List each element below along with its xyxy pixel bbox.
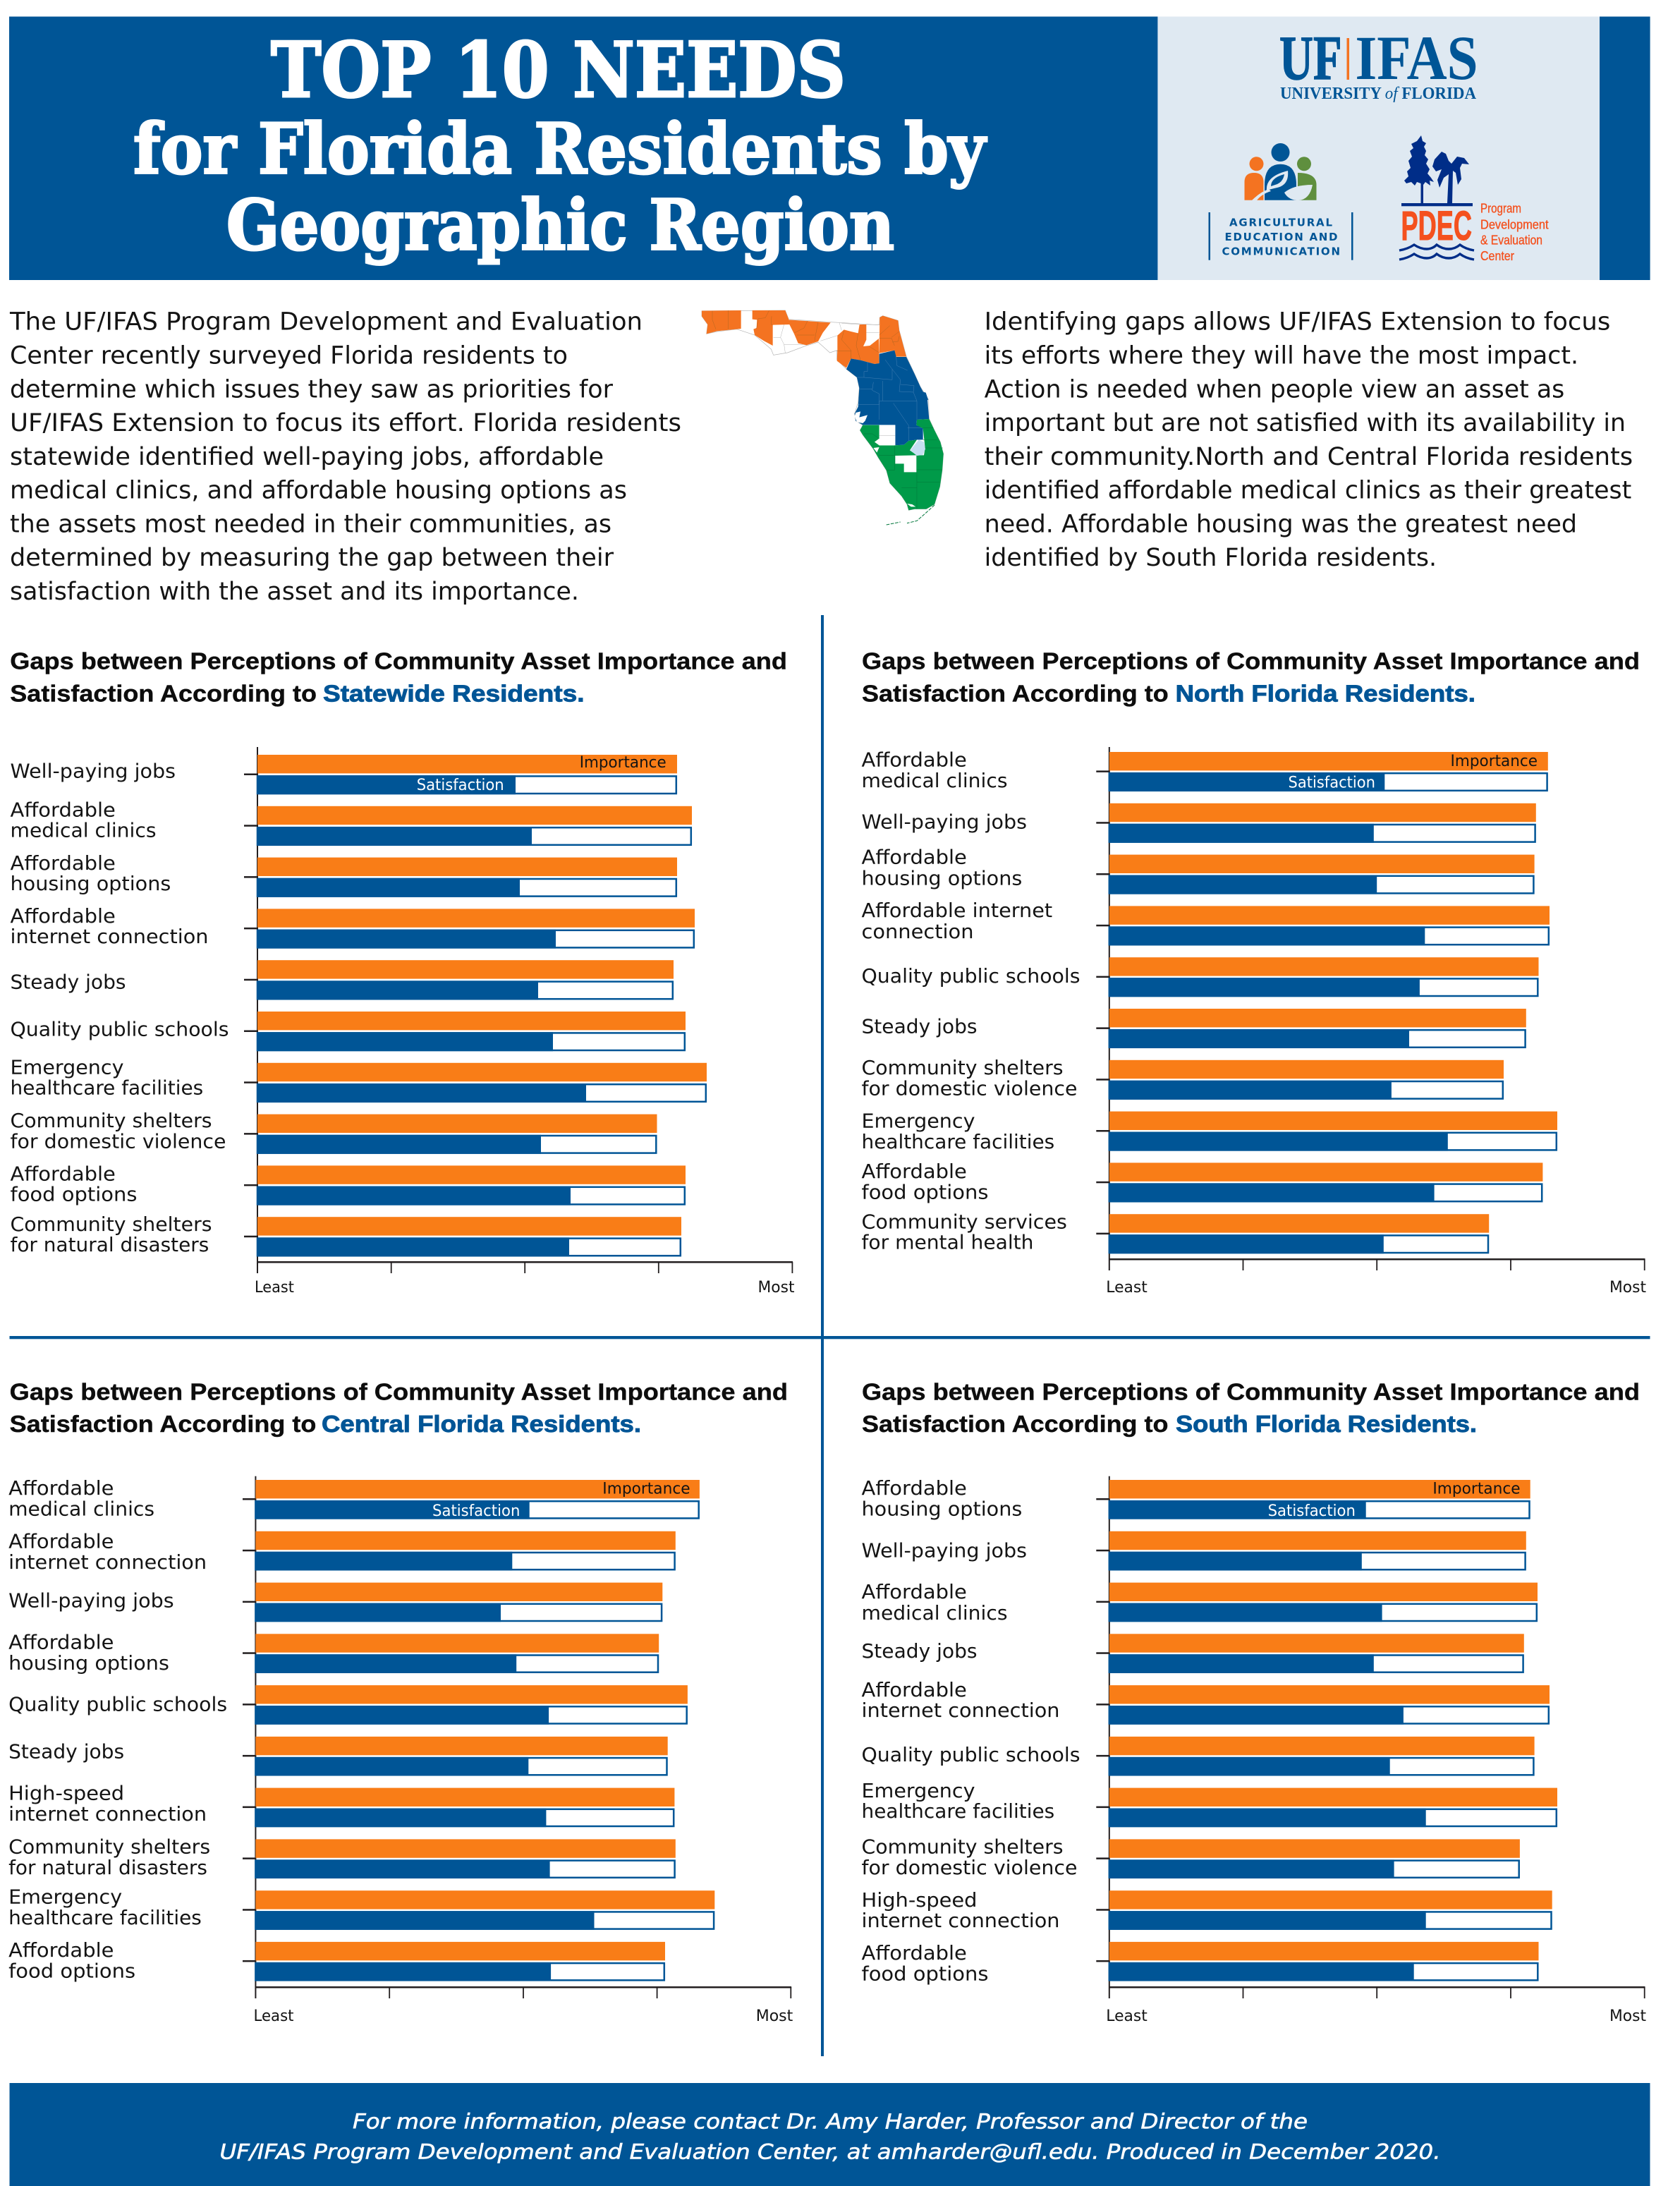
row: quality public schools: Quality public schools [862,1743,1081,1766]
chart axis: north florida: Least [1106,1279,1148,1297]
row: affordable medical clinics: medical clinics [862,769,1007,792]
row: community shelters for domestic violence [862,1835,1520,1879]
row: affordable medical clinics: medical clinics [10,818,157,842]
row: affordable food options: food options [862,1962,989,1986]
heading: south florida: South Florida Residents. [1176,1411,1477,1437]
row: affordable medical clinics: Affordable [8,1476,114,1500]
intro text left: the assets most needed in their communities, as [10,510,611,538]
row: affordable internet connection: Affordable [862,1678,967,1701]
intro text right: Identifying gaps allows UF/IFAS Extension to focus [985,308,1610,336]
intro text left: determine which issues they saw as priorities for [10,375,614,403]
heading: north florida: Gaps between Perceptions of Community Asset Importance and [862,648,1640,674]
row: affordable internet connection: Affordable [10,904,116,928]
row: community shelters for domestic violence: for domestic violence [862,1076,1078,1100]
footer banner [10,2083,1650,2186]
intro text right: need. Affordable housing was the greatest need [985,510,1577,538]
row: affordable housing options [10,851,677,897]
logo: PDEC: & Evaluation [1480,233,1542,248]
row: affordable medical clinics: Importance [602,1480,690,1498]
chart axis: statewide: Most [757,1279,795,1297]
heading: statewide: Satisfaction According to [10,680,317,706]
row: affordable internet connection: internet connection [862,1699,1059,1722]
heading: central florida: Satisfaction According to [10,1411,316,1437]
panel: central florida residents [8,1378,793,2025]
intro text right: identified affordable medical clinics as their greatest [985,477,1631,505]
row: well-paying jobs: Well-paying jobs [862,810,1027,834]
row: well-paying jobs: Well-paying jobs [10,759,176,783]
row: quality public schools: Quality public schools [862,964,1081,988]
panel: statewide residents [10,648,795,1297]
row: affordable medical clinics [10,799,692,846]
row: steady jobs: Steady jobs [862,1639,978,1663]
row: well-paying jobs [8,1583,662,1622]
header banner [9,17,1650,280]
row: high-speed internet connection: High-speed [8,1782,124,1804]
heading: statewide: Gaps between Perceptions of Community Asset Importance and [10,648,787,674]
intro text right: its efforts where they will have the most impact. [985,341,1578,370]
heading: central florida [10,1378,788,1437]
row: affordable housing options [862,846,1535,894]
row: emergency healthcare facilities [8,1886,714,1930]
logo panel [1157,17,1600,280]
row: affordable medical clinics: medical clinics [862,1601,1007,1625]
row: affordable housing options: Affordable [8,1631,114,1654]
row: affordable housing options: Satisfaction [1268,1502,1356,1520]
row: affordable medical clinics: Satisfaction [1288,775,1375,791]
heading: central florida: Central Florida Residents. [322,1411,641,1437]
row: emergency healthcare facilities: healthcare facilities [10,1076,203,1099]
row: quality public schools [10,1012,686,1051]
row: affordable internet connection: internet connection [10,925,209,948]
row: affordable medical clinics [862,748,1548,792]
row: affordable housing options [8,1631,659,1675]
heading: statewide [10,648,787,706]
row: quality public schools: Quality public schools [10,1017,229,1041]
intro text left: determined by measuring the gap between their [10,544,614,572]
intro text left: statewide identified well-paying jobs, affordable [10,443,604,471]
intro text right: Action is needed when people view an asset as [985,375,1564,403]
heading: south florida: Gaps between Perceptions of Community Asset Importance and [862,1378,1640,1404]
row: well-paying jobs [862,1531,1526,1570]
row: affordable housing options: Affordable [10,851,116,875]
row: community shelters for domestic violence: Community shelters [10,1109,212,1132]
heading: north florida: North Florida Residents. [1176,680,1475,706]
row: emergency healthcare facilities: Emergency [10,1055,124,1079]
row: well-paying jobs: Well-paying jobs [862,1539,1027,1562]
row: high-speed internet connection: internet connection [8,1802,207,1826]
row: steady jobs: Steady jobs [10,971,126,993]
row: affordable food options [8,1938,665,1982]
row: well-paying jobs: Well-paying jobs [8,1589,174,1613]
row: affordable medical clinics: Affordable [862,1580,967,1603]
intro text right: important but are not satisfied with its availability in [985,409,1626,437]
row: affordable medical clinics: Affordable [862,748,967,772]
intro text right [985,308,1633,572]
title: Geographic Region [226,186,894,267]
panel: north florida residents [862,648,1646,1297]
row: emergency healthcare facilities [862,1779,1557,1827]
row: steady jobs: Steady jobs [8,1739,124,1763]
intro text left: The UF/IFAS Program Development and Evaluation [9,308,643,336]
chart axis: statewide: Least [255,1279,294,1297]
row: quality public schools [862,1737,1535,1776]
row: affordable housing options: housing options [862,866,1022,889]
row: steady jobs: Steady jobs [862,1014,978,1038]
row: well-paying jobs: Importance [580,754,666,772]
logo: PDEC [1399,135,1549,263]
logo: agricultural education and communication [1209,143,1353,260]
chart axis: north florida: Most [1609,1279,1646,1297]
row: affordable food options: Affordable [862,1941,967,1965]
row: community shelters for natural disasters: for natural disasters [8,1856,207,1879]
row: emergency healthcare facilities: Emergency [8,1886,122,1909]
row: affordable housing options: housing options [10,872,171,895]
row: affordable internet connection [10,904,695,949]
row: community shelters for natural disasters: Community shelters [10,1213,212,1236]
row: quality public schools [862,957,1539,997]
row: affordable medical clinics [8,1476,700,1521]
chart axis: central florida: Most [756,2008,793,2025]
intro text left: satisfaction with the asset and its importance. [10,578,579,606]
row: community shelters for domestic violence [10,1109,657,1154]
row: community shelters for domestic violence: for domestic violence [10,1130,226,1153]
row: community shelters for natural disasters: for natural disasters [10,1233,209,1256]
logo: agricultural education and communication: COMMUNICATION [1222,245,1340,257]
row: community services for mental health: for mental health [862,1231,1034,1254]
row: affordable internet connection: Affordable internet [862,899,1052,922]
heading: north florida: Satisfaction According to [862,680,1169,706]
title: for Florida Residents by [133,109,987,190]
row: well-paying jobs [10,754,677,794]
row: emergency healthcare facilities [10,1055,707,1103]
row: affordable housing options: Importance [1432,1480,1521,1498]
row: affordable internet connection: internet connection [8,1550,207,1574]
logo: UF IFAS: IFAS [1356,24,1478,93]
row: affordable food options: food options [8,1960,135,1982]
row: community shelters for domestic violence: Community shelters [862,1835,1064,1858]
row: affordable medical clinics [862,1580,1538,1625]
row: affordable medical clinics: medical clinics [8,1497,154,1521]
row: emergency healthcare facilities: healthcare facilities [862,1799,1054,1823]
row: emergency healthcare facilities [862,1110,1557,1153]
logo: UF IFAS: UF [1279,24,1341,93]
row: quality public schools: Quality public schools [8,1692,227,1716]
logo: PDEC: Program [1480,201,1521,216]
intro text left: medical clinics, and affordable housing options as [10,477,627,505]
row: affordable food options: food options [10,1182,137,1206]
intro text left: Center recently surveyed Florida residents to [10,341,568,370]
heading: north florida [862,648,1640,706]
row: affordable medical clinics: Importance [1450,753,1538,770]
logo: PDEC: Development [1480,217,1549,231]
logo: PDEC: Center [1480,248,1514,263]
row: affordable food options: Affordable [862,1160,967,1183]
chart axis: statewide [255,747,795,1297]
row: high-speed internet connection: internet connection [862,1909,1059,1932]
title: TOP 10 NEEDS [271,26,846,115]
logo: agricultural education and communication: EDUCATION AND [1224,231,1337,243]
row: affordable housing options: housing options [862,1497,1022,1521]
row: steady jobs [10,960,674,1000]
row: community shelters for domestic violence: for domestic violence [862,1856,1078,1879]
row: affordable food options [10,1162,686,1206]
row: community shelters for natural disasters [10,1213,681,1256]
row: well-paying jobs [862,803,1536,843]
row: community services for mental health: Community services [862,1210,1067,1233]
intro text right: their community.North and Central Florida residents [985,443,1633,471]
row: affordable food options: Affordable [8,1938,114,1962]
row: affordable internet connection: connection [862,920,973,943]
row: affordable internet connection [8,1529,676,1574]
row: quality public schools [8,1685,688,1725]
footer banner: UF/IFAS Program Development and Evaluation Center, at amharder@ufl.edu. Produced in December 2020. [220,2139,1440,2163]
row: affordable internet connection: Affordable [8,1529,114,1553]
row: well-paying jobs: Satisfaction [417,777,504,794]
row: steady jobs [862,1009,1526,1048]
map of Florida regions [702,310,944,525]
row: high-speed internet connection: High-speed [862,1888,978,1912]
chart axis: central florida [254,1476,793,2025]
chart axis: south florida: Most [1609,2008,1646,2025]
row: affordable medical clinics: Satisfaction [432,1502,520,1520]
heading: south florida [862,1378,1640,1437]
row: affordable housing options: Affordable [862,1476,967,1500]
row: emergency healthcare facilities: healthcare facilities [8,1906,202,1929]
row: affordable food options: food options [862,1181,989,1204]
chart axis: south florida [1106,1476,1646,2025]
row: affordable internet connection [862,899,1550,945]
logo: PDEC: PDEC [1401,203,1472,249]
intro text left [9,308,681,606]
intro text left: UF/IFAS Extension to focus its effort. Florida residents [10,409,681,437]
logo: UF IFAS [1279,24,1478,103]
heading: central florida: Gaps between Perceptions of Community Asset Importance and [10,1378,788,1404]
row: affordable medical clinics: Affordable [10,799,116,821]
heading: statewide: Statewide Residents. [323,680,584,706]
chart axis: north florida [1106,747,1646,1297]
row: affordable housing options: housing options [8,1651,169,1675]
panel: south florida residents [862,1378,1646,2025]
row: steady jobs [862,1634,1524,1673]
row: affordable food options [862,1160,1542,1204]
row: emergency healthcare facilities: Emergency [862,1110,975,1133]
row: community shelters for domestic violence [862,1056,1504,1100]
title [133,26,987,267]
row: affordable food options [862,1941,1539,1986]
row: high-speed internet connection [862,1888,1552,1932]
intro text right: identified by South Florida residents. [985,544,1437,572]
row: community services for mental health [862,1210,1489,1254]
logo: agricultural education and communication: AGRICULTURAL [1229,217,1332,229]
row: affordable housing options [862,1476,1530,1521]
row: high-speed internet connection [8,1782,674,1827]
row: community shelters for natural disasters: Community shelters [8,1835,210,1858]
chart axis: south florida: Least [1106,2008,1148,2025]
footer banner: For more information, please contact Dr. Amy Harder, Professor and Director of the [353,2110,1308,2134]
row: emergency healthcare facilities: Emergency [862,1779,975,1802]
heading: south florida: Satisfaction According to [862,1411,1168,1437]
row: community shelters for domestic violence: Community shelters [862,1056,1064,1079]
row: affordable internet connection [862,1678,1550,1725]
row: affordable housing options: Affordable [862,846,967,869]
row: steady jobs [8,1737,668,1776]
row: affordable food options: Affordable [10,1162,116,1185]
chart axis: central florida: Least [254,2008,294,2025]
logo: UF IFAS: UNIVERSITY of FLORIDA [1280,85,1477,103]
row: emergency healthcare facilities: healthcare facilities [862,1130,1054,1153]
row: community shelters for natural disasters [8,1835,676,1879]
